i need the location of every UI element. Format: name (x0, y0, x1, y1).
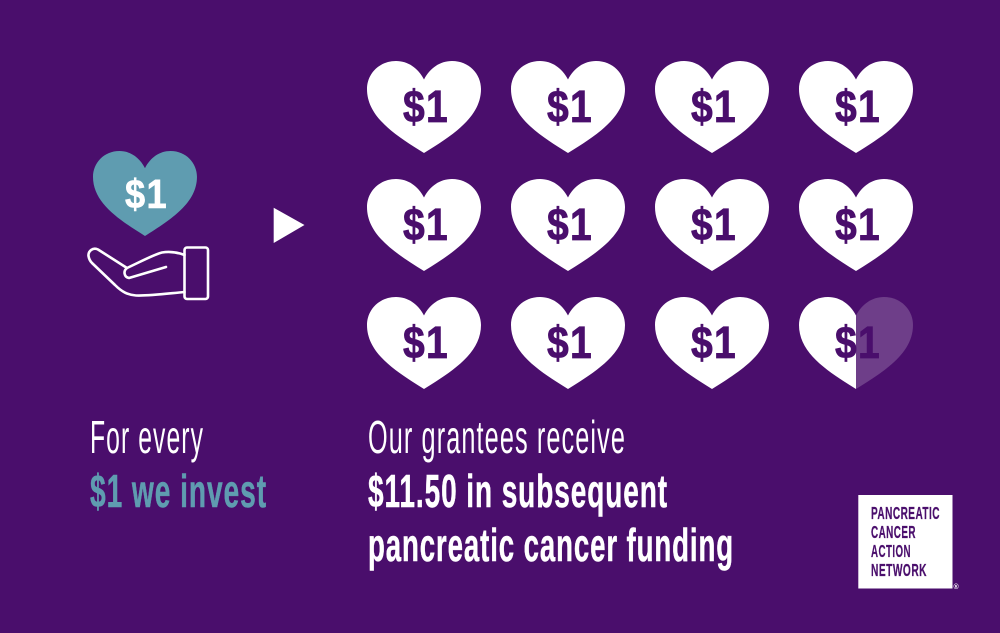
text: grantees receive funding: $11.50 in subsequent (368, 465, 668, 517)
heart row 2 column 2 (511, 179, 625, 271)
heart row 3 column 2: $1 (547, 317, 593, 368)
logo: Pancreatic Cancer Action Network (858, 495, 960, 591)
heart row 2 column 3 (655, 179, 769, 271)
half-filled heart row 3 column 4 (799, 297, 913, 389)
icon: teal heart with $1 (93, 151, 197, 236)
heart row 1 column 4 (799, 61, 913, 153)
icon: teal heart with $1: $1 (125, 171, 168, 217)
logo: Pancreatic Cancer Action Network: PANCREATIC (871, 503, 940, 523)
heart row 3 column 1: $1 (403, 317, 449, 368)
heart row 1 column 4: $1 (835, 81, 881, 132)
text: grantees receive funding: Our grantees receive (368, 411, 626, 463)
heart row 3 column 3: $1 (691, 317, 737, 368)
heart row 1 column 1: $1 (403, 81, 449, 132)
heart row 1 column 3: $1 (691, 81, 737, 132)
heart row 2 column 2: $1 (547, 199, 593, 250)
panel: grid of hearts (367, 61, 913, 389)
heart row 2 column 3: $1 (691, 199, 737, 250)
heart row 1 column 1 (367, 61, 481, 153)
heart row 3 column 2 (511, 297, 625, 389)
logo: Pancreatic Cancer Action Network: ACTION (871, 541, 911, 561)
arrow (274, 208, 304, 243)
heart row 2 column 1: $1 (403, 199, 449, 250)
heart row 3 column 3 (655, 297, 769, 389)
logo: Pancreatic Cancer Action Network: ® (954, 583, 960, 591)
heart row 3 column 1 (367, 297, 481, 389)
heart row 1 column 2: $1 (547, 81, 593, 132)
heart row 2 column 1 (367, 179, 481, 271)
heart row 1 column 3 (655, 61, 769, 153)
icon: open hand (88, 248, 208, 299)
text: grantees receive funding: pancreatic cancer funding (368, 519, 734, 571)
text: grantees receive funding (368, 411, 734, 571)
half-filled heart row 3 column 4: $1 (835, 317, 881, 368)
heart row 2 column 4: $1 (835, 199, 881, 250)
text: for every $1 we invest: $1 we invest (90, 465, 267, 517)
logo: Pancreatic Cancer Action Network: NETWORK (871, 560, 927, 580)
text: for every $1 we invest: For every (90, 411, 204, 463)
logo: Pancreatic Cancer Action Network: CANCER (871, 522, 916, 542)
heart row 2 column 4 (799, 179, 913, 271)
text: for every $1 we invest (90, 411, 267, 517)
heart row 1 column 2 (511, 61, 625, 153)
panel: one dollar invested (88, 151, 208, 299)
